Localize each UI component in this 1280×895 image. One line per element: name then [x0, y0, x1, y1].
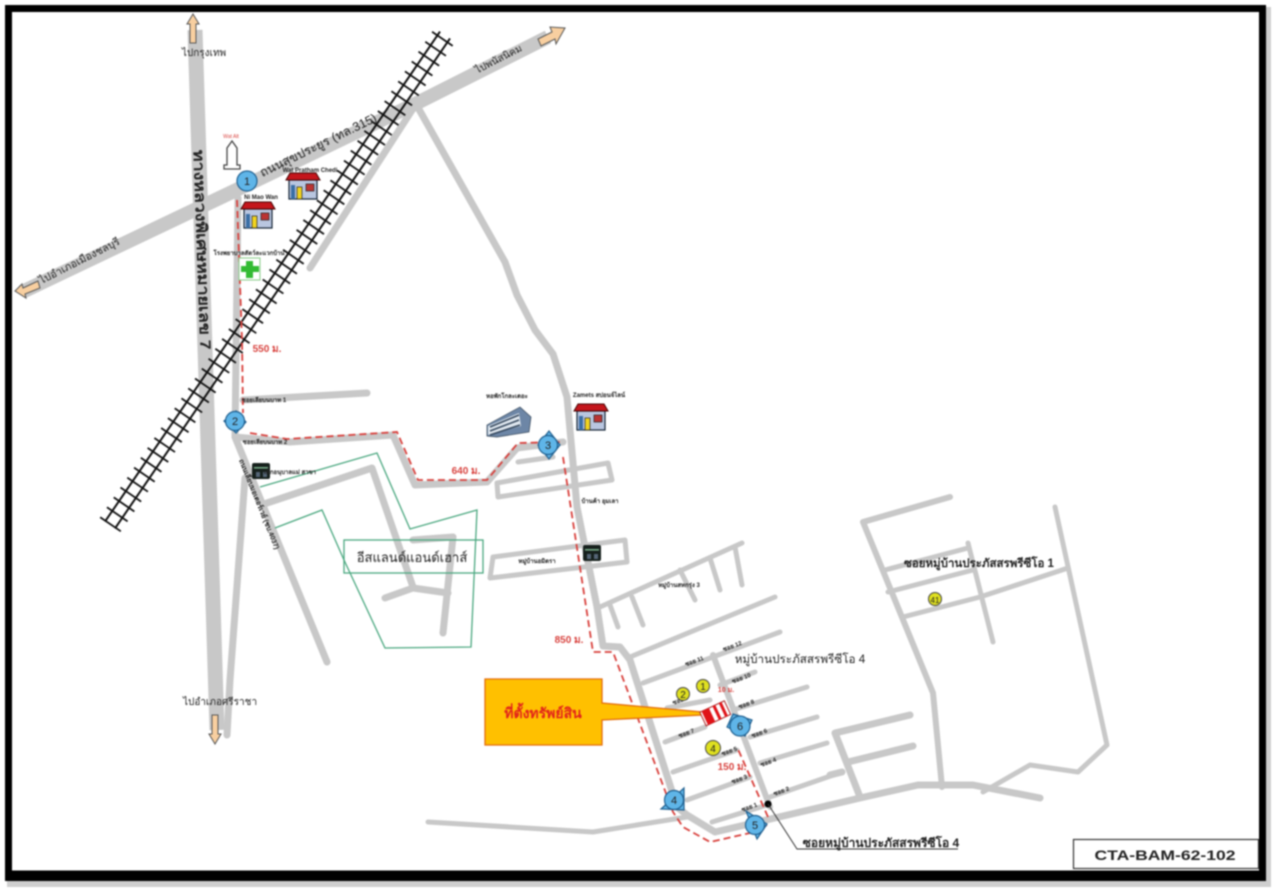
numbered route markers: [224, 171, 767, 839]
distance labels: Wat Alt: [223, 134, 239, 140]
distance labels: 550 ม.: [253, 344, 282, 355]
reference code box: [1074, 840, 1258, 868]
estate boundary: [260, 453, 477, 648]
place labels: เด็กอนุบาลแม่ สาขา: [264, 467, 316, 476]
estate label: [344, 540, 483, 573]
road labels: ทางหลวงพิเศษหมายเลข 7: [190, 150, 214, 350]
road labels: ไปกรุงเทพ: [181, 47, 226, 59]
icon: houses: [241, 173, 608, 430]
callout: property location: [485, 679, 702, 745]
yellow markers: [676, 592, 942, 756]
soi number labels: ซอย 2: [773, 785, 791, 798]
leader line: [764, 800, 958, 849]
place labels: หมู่บ้านสหกรุ่ง 3: [658, 581, 700, 590]
place labels: ซอยหมู่บ้านประภัสสรพรีซีโอ 4: [803, 835, 960, 851]
property marker: [700, 701, 731, 726]
soi number labels: ซอย 6: [751, 727, 769, 740]
distance labels: 150 ม.: [718, 762, 747, 773]
soi number labels: ซอย 1: [741, 801, 759, 814]
marker numbers: [232, 176, 758, 832]
marker numbers: 2: [232, 416, 238, 428]
soi number labels: ซอย 3: [731, 773, 749, 786]
place labels: ซอยหมู่บ้านประภัสสรพรีซีโอ 1: [904, 555, 1055, 571]
yellow marker numbers: 4: [710, 744, 716, 755]
road labels: ไปอำเภอศรีราชา: [182, 696, 257, 708]
place labels: [212, 168, 1055, 851]
place labels: บ้านค้า อุมเลา: [582, 497, 618, 505]
icon: pharmacy cross: [239, 258, 260, 280]
yellow marker numbers: 41: [931, 596, 940, 605]
soi number labels: [672, 640, 791, 814]
place labels: ซอยเลียบนบาท 2: [243, 438, 288, 446]
marker numbers: 5: [752, 820, 758, 832]
place labels: Wat Pratham Chedi: [283, 168, 338, 174]
distance labels: 640 ม.: [452, 466, 481, 477]
distance labels: 850 ม.: [555, 635, 584, 646]
road labels: [36, 42, 524, 708]
soi number labels: ซอย 12: [722, 640, 743, 653]
marker numbers: 6: [737, 721, 743, 733]
place labels: ซอยเลียบนบาท 1: [242, 396, 287, 404]
direction arrows: [15, 14, 565, 744]
icon: monument: [224, 141, 240, 169]
place labels: หมู่บ้านประภัสสรพรีซีโอ 4: [735, 652, 866, 667]
road labels: ไปพนัสนิคม: [472, 42, 524, 77]
yellow marker numbers: [680, 596, 940, 755]
road network: [22, 30, 1107, 832]
road labels: ถนนเลียบมอเตอร์เวย์ (ชบ.4037): [237, 458, 282, 550]
soi number labels: ซอย 11: [684, 655, 705, 668]
yellow marker numbers: 1: [700, 682, 706, 693]
soi number labels: ซอย 4: [760, 756, 778, 769]
railway: [105, 32, 450, 528]
red dashed route: [237, 200, 768, 842]
soi number labels: ซอย 8: [738, 698, 756, 711]
soi number labels: ซอย 7: [678, 727, 696, 740]
distance labels: 10 ม.: [718, 687, 734, 694]
icon: shops: [252, 463, 601, 561]
marker numbers: 3: [545, 440, 551, 452]
place labels: Zamets สปอนจ์ไลน์: [573, 391, 626, 399]
marker numbers: 4: [671, 795, 677, 807]
estate label: อีสแลนด์แอนด์เฮาส์: [357, 550, 467, 565]
road labels: ถนนสุขประยูร (ทล.315): [258, 111, 379, 181]
soi number labels: ซอย 5: [721, 745, 739, 758]
place labels: โรงพยาบาลสัตว์ละแวกบ้าน: [212, 249, 285, 257]
place labels: Ni Mao Wan: [244, 195, 278, 201]
callout: property location: ที่ตั้งทรัพย์สิน: [504, 702, 582, 721]
distance labels: [223, 134, 747, 773]
reference code box: CTA-BAM-62-102: [1094, 847, 1236, 863]
place labels: หอพักโกละเดอะ: [486, 392, 528, 400]
soi number labels: ซอย 9: [672, 694, 690, 707]
icon: office building: [487, 407, 531, 437]
soi number labels: ซอย 10: [731, 672, 752, 685]
marker numbers: 1: [244, 176, 250, 188]
yellow marker numbers: 2: [680, 690, 686, 701]
place labels: หมู่บ้านอมิตรา: [518, 557, 556, 566]
road labels: ไปอำเภอเมืองชลบุรี: [36, 235, 122, 287]
